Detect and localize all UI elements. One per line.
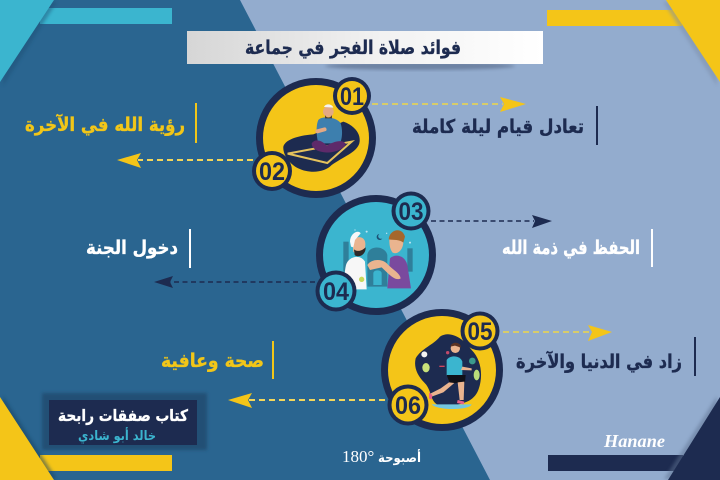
- author signature: Hanane: [603, 431, 665, 451]
- title banner: فوائد صلاة الفجر في جماعة: [245, 37, 461, 59]
- icon: two men shaking hands before a mosque: [343, 229, 413, 289]
- corner: top-left teal bar and triangle: [0, 0, 172, 86]
- source credit: أصبوحة: [378, 449, 421, 466]
- corner: bottom-left yellow bar and triangle: [0, 396, 172, 480]
- number badge 01: 01: [340, 83, 364, 111]
- benefit text 01: تعادل قيام ليلة كاملة: [412, 116, 584, 138]
- arrow 02: [117, 153, 253, 168]
- corner: bottom-right navy bar and triangle: [548, 396, 720, 480]
- book credit box: كتاب صفقات رابحة: [58, 406, 189, 425]
- icon: man on prayer rug: [283, 104, 360, 172]
- background: dark diagonal panel: [0, 0, 490, 480]
- number badge 06: 06: [395, 392, 421, 420]
- icon: runner with healthy food: [415, 334, 481, 409]
- benefit text 05: زاد في الدنيا والآخرة: [516, 350, 682, 373]
- benefit 01 group: circle with praying man: [252, 77, 376, 198]
- arrow 03: [431, 215, 552, 228]
- book credit box: [42, 393, 207, 450]
- benefit text 04: دخول الجنة: [86, 237, 178, 259]
- benefit text 04: [86, 229, 191, 268]
- number badge 05: 05: [468, 318, 493, 346]
- benefit text 06: [161, 341, 274, 379]
- source credit: 180°: [342, 447, 374, 466]
- number badge 03: 03: [398, 198, 424, 226]
- benefit text 02: رؤية الله في الآخرة: [25, 113, 185, 136]
- book credit box: خالد أبو شادي: [78, 427, 156, 444]
- benefit 03 group: circle with two men and mosque: [316, 192, 436, 315]
- source credit: [342, 447, 421, 466]
- benefit text 03: الحفظ في ذمة الله: [502, 237, 640, 259]
- title banner: [187, 31, 543, 70]
- number badge 04: 04: [323, 278, 349, 306]
- arrow 01: [372, 97, 526, 112]
- arrow 06: [228, 393, 385, 408]
- benefit text 06: صحة وعافية: [161, 350, 264, 372]
- arrow 05: [503, 325, 612, 341]
- benefit 05 group: circle with runner: [381, 309, 503, 431]
- number badge 02: 02: [259, 158, 285, 186]
- corner: top-right yellow bar and triangle: [547, 0, 720, 86]
- arrow 04: [154, 276, 315, 288]
